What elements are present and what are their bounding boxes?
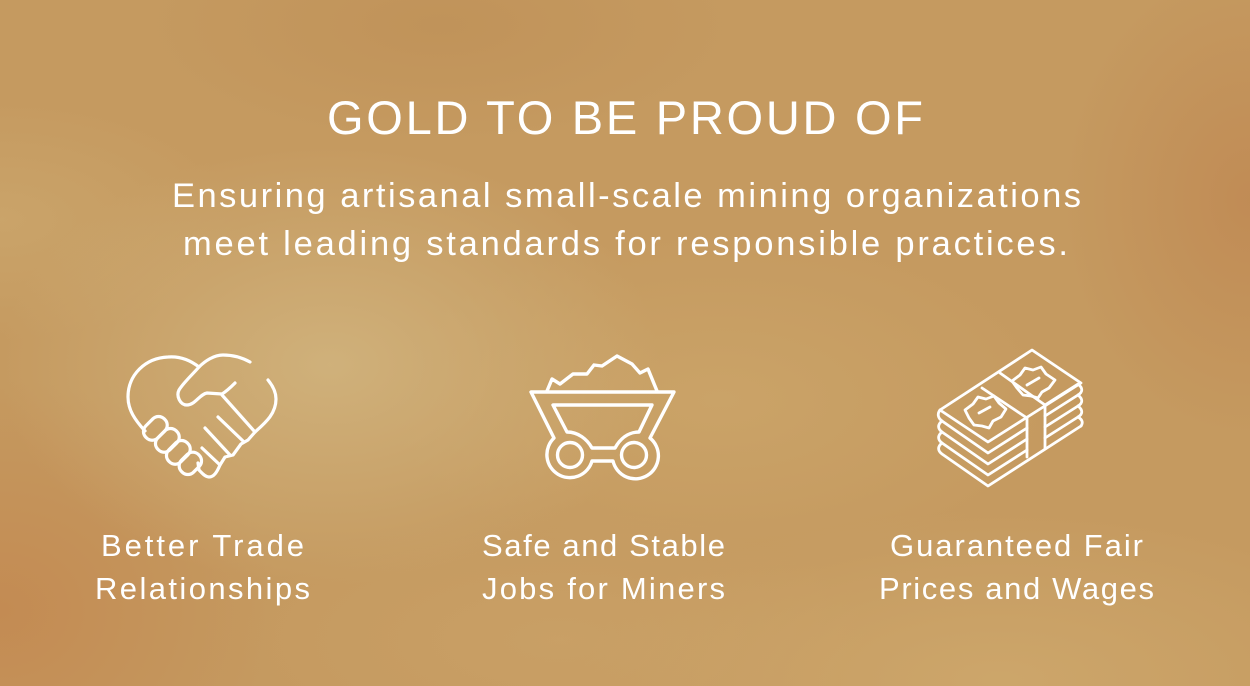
- label: safe and stable jobs: [482, 528, 725, 606]
- subtitle: Ensuring artisanal small-scale mining organizations: [172, 177, 1081, 215]
- label: better trade relationships: [95, 528, 310, 606]
- icon: mining cart: [531, 356, 674, 479]
- label: guaranteed fair prices: Guaranteed Fair: [890, 528, 1143, 563]
- subtitle: [172, 177, 1081, 263]
- label: better trade relationships: Better Trade: [101, 528, 304, 563]
- icon: handshake heart: [128, 355, 276, 478]
- label: guaranteed fair prices: [879, 528, 1154, 606]
- subtitle: meet leading standards for responsible practices.: [183, 225, 1068, 263]
- label: better trade relationships: Relationships: [95, 571, 310, 606]
- label: guaranteed fair prices: Prices and Wages: [879, 571, 1154, 606]
- title: GOLD TO BE PROUD OF: [327, 91, 923, 144]
- label: safe and stable jobs: Safe and Stable: [482, 528, 725, 563]
- label: safe and stable jobs: Jobs for Miners: [482, 571, 725, 606]
- icon: stack of money: [938, 350, 1082, 486]
